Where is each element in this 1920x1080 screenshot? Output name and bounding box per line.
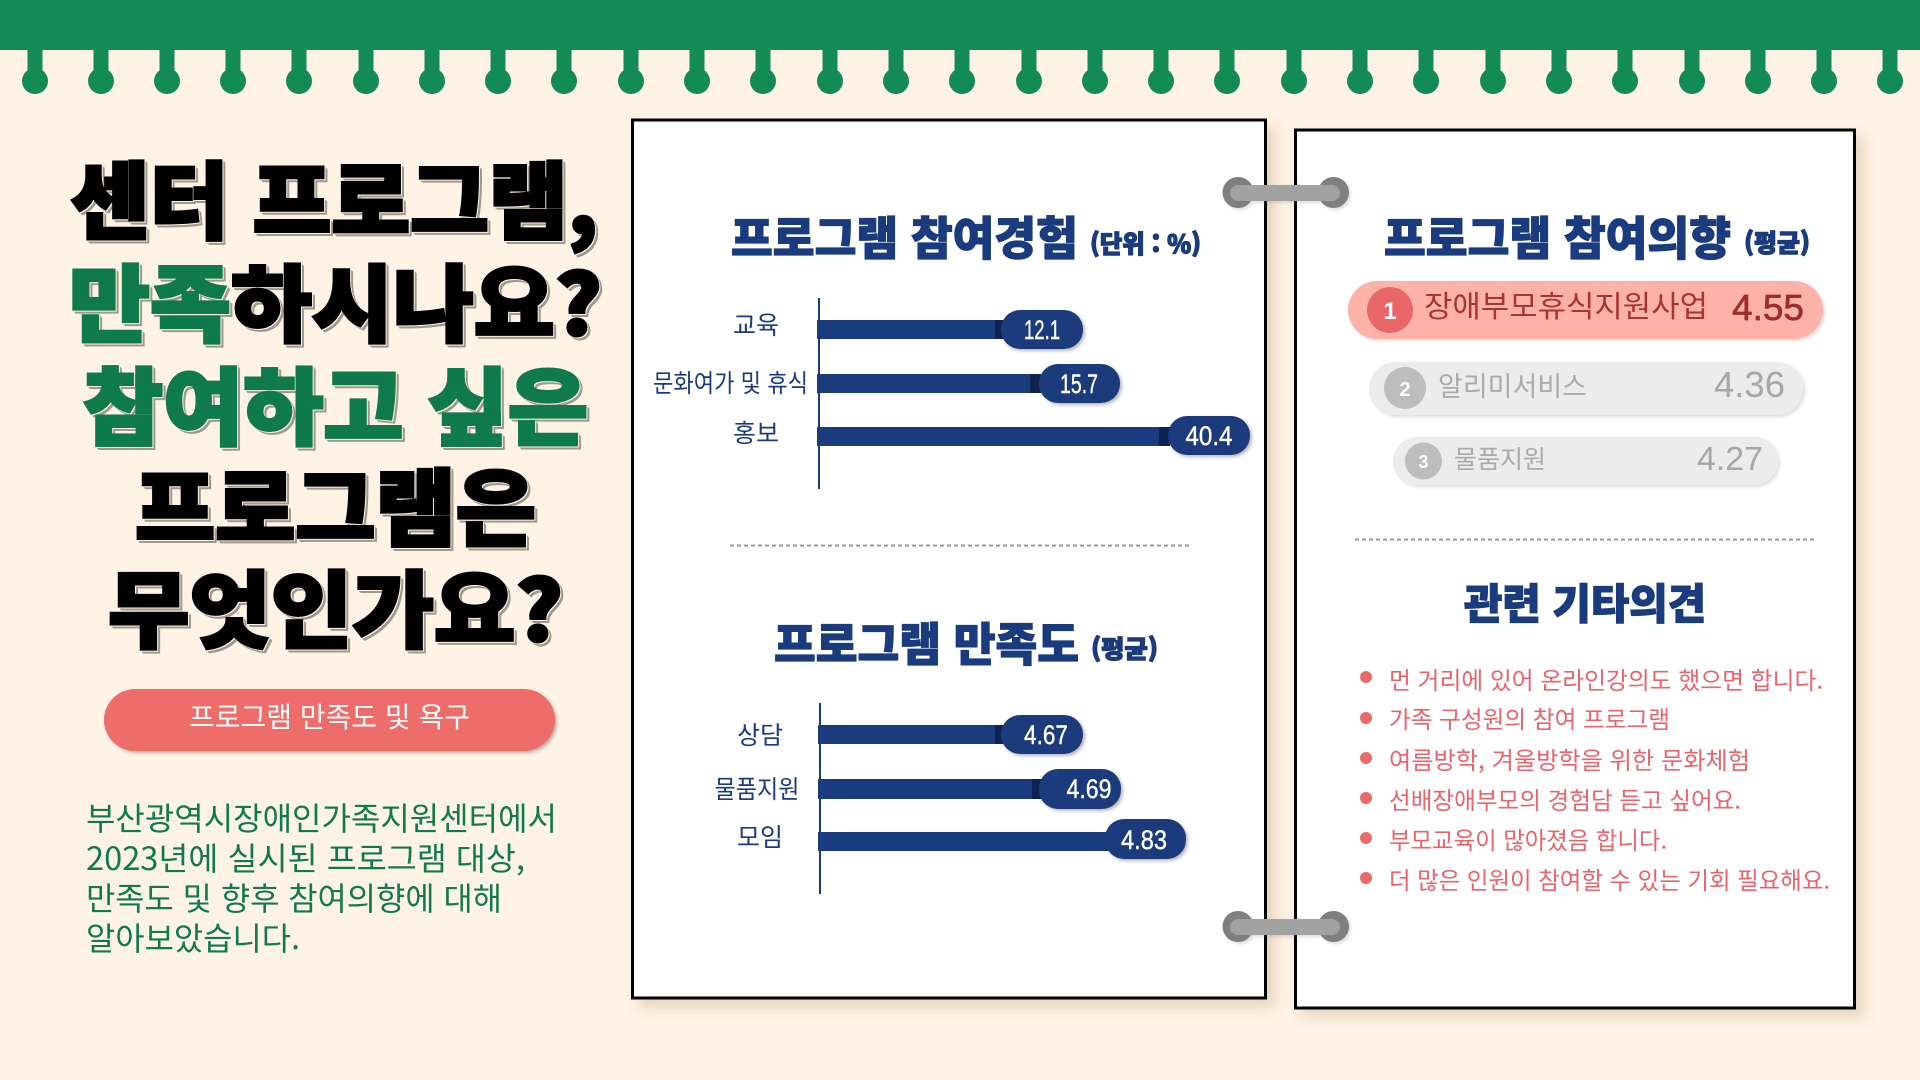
heading: other opinions: 관련 기타의견 bbox=[1464, 571, 1706, 632]
subtitle pill: 프로그램 만족도 및 욕구 bbox=[189, 696, 470, 736]
opinions list bbox=[1360, 661, 1830, 896]
title line 4: 프로그램은 bbox=[135, 443, 536, 564]
title bbox=[69, 136, 602, 666]
rank 2 row: 2 bbox=[1399, 379, 1411, 401]
panel: participation experience and satisfaction bbox=[632, 120, 1266, 998]
opinions list: 가족 구성원의 참여 프로그램 bbox=[1389, 700, 1670, 735]
rank 1 row: 4.55 bbox=[1732, 287, 1804, 328]
rank 2 row: 알리미서비스 bbox=[1438, 365, 1587, 404]
bar: meetings 4.83: 4.83 bbox=[1121, 825, 1167, 855]
heading: satisfaction: (평균) bbox=[1091, 630, 1158, 666]
description text: 2023년에 실시된 프로그램 대상, bbox=[86, 834, 525, 880]
description text: 부산광역시장애인가족지원센터에서 bbox=[86, 794, 557, 840]
bar: promotion 40.4 bbox=[733, 414, 1250, 455]
title line 5: 무엇인가요? bbox=[108, 545, 563, 666]
bar: meetings 4.83 bbox=[737, 818, 1186, 859]
bar: promotion 40.4: 40.4 bbox=[1186, 421, 1232, 451]
title line 1: 센터 프로그램, bbox=[71, 136, 598, 257]
rank 1 row bbox=[1348, 281, 1823, 339]
rank 2 row bbox=[1369, 362, 1803, 415]
opinions list: 선배장애부모의 경험담 듣고 싶어요. bbox=[1389, 781, 1741, 816]
header band with hanging tabs bbox=[0, 0, 1920, 94]
rank 3 row: 물품지원 bbox=[1454, 440, 1546, 476]
panel: participation intent and other opinions bbox=[1296, 130, 1854, 1008]
rank 3 row bbox=[1393, 437, 1778, 485]
binder ring: top bbox=[1222, 177, 1349, 208]
bar: counseling 4.67 bbox=[737, 715, 1083, 754]
rank 1 row: 1 bbox=[1383, 298, 1397, 325]
bar: counseling 4.67: 상담 bbox=[737, 716, 783, 752]
rank 3 row: 3 bbox=[1418, 452, 1429, 472]
bar chart: satisfaction bbox=[714, 703, 1186, 894]
bar: culture and rest 15.7: 문화여가 및 휴식 bbox=[653, 364, 808, 400]
heading: participation intent: 프로그램 참여의향 bbox=[1384, 203, 1731, 269]
bar: goods support 4.69: 물품지원 bbox=[714, 770, 800, 806]
heading: participation experience: 프로그램 참여경험 bbox=[731, 203, 1078, 269]
rank 3 row: 4.27 bbox=[1697, 440, 1763, 477]
heading: participation experience: (단위 : %) bbox=[1090, 225, 1201, 261]
bar: goods support 4.69 bbox=[714, 769, 1121, 809]
rank 2 row: 4.36 bbox=[1714, 364, 1785, 405]
bar: culture and rest 15.7 bbox=[653, 364, 1120, 403]
bar: education 12.1: 12.1 bbox=[1024, 315, 1060, 345]
heading: participation intent: (평균) bbox=[1744, 224, 1810, 260]
bar chart: participation experience bbox=[653, 298, 1250, 489]
title line 2: 만족하시나요? bbox=[69, 239, 602, 360]
binder ring: bottom bbox=[1222, 911, 1349, 942]
subtitle pill bbox=[104, 689, 555, 751]
description text: 알아보았습니다. bbox=[86, 914, 300, 960]
description text: 만족도 및 향후 참여의향에 대해 bbox=[86, 874, 502, 920]
bar: education 12.1: 교육 bbox=[733, 306, 779, 342]
opinions list: 더 많은 인원이 참여할 수 있는 기회 필요해요. bbox=[1389, 861, 1830, 896]
rank 1 row: 장애부모휴식지원사업 bbox=[1424, 282, 1708, 326]
bar: culture and rest 15.7: 15.7 bbox=[1060, 369, 1098, 399]
bar: goods support 4.69: 4.69 bbox=[1066, 774, 1112, 804]
bar: counseling 4.67: 4.67 bbox=[1024, 720, 1068, 750]
opinions list: 여름방학, 겨울방학을 위한 문화체험 bbox=[1389, 741, 1750, 776]
heading: satisfaction: 프로그램 만족도 bbox=[774, 609, 1079, 675]
bar: promotion 40.4: 홍보 bbox=[733, 414, 779, 450]
bar: education 12.1 bbox=[733, 306, 1083, 349]
description text bbox=[86, 794, 557, 960]
bar: meetings 4.83: 모임 bbox=[737, 818, 783, 854]
opinions list: 먼 거리에 있어 온라인강의도 했으면 합니다. bbox=[1389, 661, 1823, 696]
opinions list: 부모교육이 많아졌음 합니다. bbox=[1389, 821, 1667, 856]
title line 3: 참여하고 싶은 bbox=[83, 342, 588, 463]
